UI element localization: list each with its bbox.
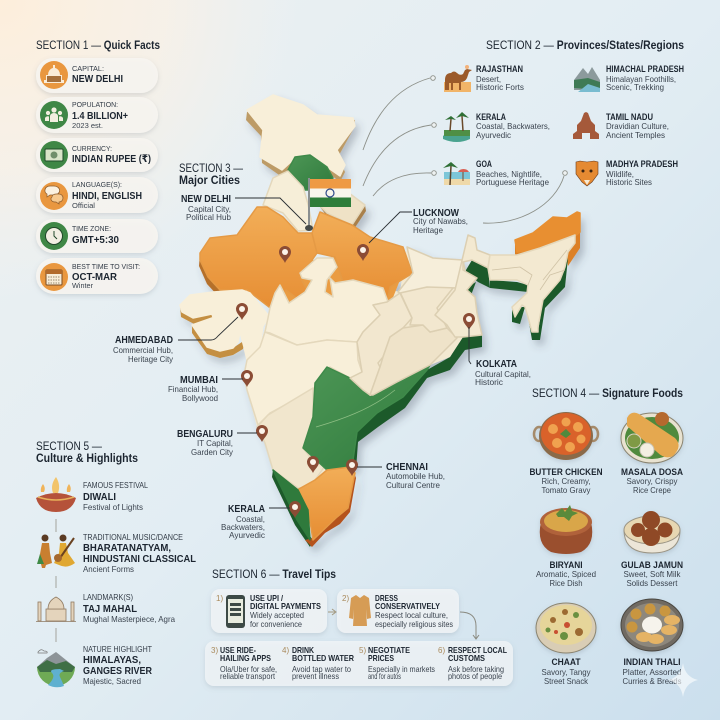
city: Kerala: KERALA xyxy=(228,504,265,515)
Rajasthan item: RAJASTHAN xyxy=(476,64,523,74)
base orange fill xyxy=(262,255,400,312)
card: currency xyxy=(36,138,158,172)
item: Himalayas: HIMALAYAS, xyxy=(83,654,141,666)
card: capital xyxy=(36,58,158,93)
tip 4: Avoid tap water to xyxy=(292,665,351,674)
item: Diwali: Festival of Lights xyxy=(83,503,143,512)
item: Taj Mahal: LANDMARK(S) xyxy=(83,593,133,602)
region: Uttarakhand xyxy=(317,180,365,225)
tip 1 card: DIGITAL PAYMENTS xyxy=(250,601,321,611)
item: Diwali: DIWALI xyxy=(83,491,116,503)
tip 4: 4) xyxy=(282,646,289,655)
icon: tiger xyxy=(576,161,598,186)
card: population: 2023 est. xyxy=(72,121,103,130)
Goa item xyxy=(443,159,549,187)
Goa item: GOA xyxy=(476,159,492,169)
Goa item: Beaches, Nightlife, xyxy=(476,170,542,179)
item: Taj Mahal: TAJ MAHAL xyxy=(83,603,138,615)
pin: Bengaluru coast xyxy=(256,425,268,442)
tip 2 card: especially religious sites xyxy=(375,620,453,629)
food: chaat: CHAAT xyxy=(552,657,581,667)
icon: mountains xyxy=(574,67,600,92)
tip 1 card: 1) xyxy=(216,594,223,603)
arrow: tip 1 to tip 2 xyxy=(328,609,336,615)
city: Ahmedabad: Heritage City xyxy=(128,355,174,364)
card: languages: LANGUAGE(S): xyxy=(72,180,122,189)
city: Lucknow: City of Nawabs, xyxy=(413,217,468,226)
item: Taj Mahal xyxy=(36,593,175,624)
section 1: quick facts xyxy=(36,40,160,294)
city: Chennai: Automobile Hub, xyxy=(386,472,445,481)
region: West Bengal xyxy=(435,235,490,337)
city: Ahmedabad xyxy=(113,335,174,364)
city: Lucknow xyxy=(413,208,468,235)
card: languages: HINDI, ENGLISH xyxy=(72,190,142,202)
pin: Kerala xyxy=(289,501,301,518)
arrow: tip 2 to tips row xyxy=(460,612,479,639)
Rajasthan item: Desert, xyxy=(476,75,501,84)
icon: dancers xyxy=(37,534,75,568)
region: Uttar Pradesh xyxy=(312,212,413,302)
tip 5: Especially in markets xyxy=(368,665,435,674)
city: Kolkata xyxy=(475,359,531,387)
city: Chennai xyxy=(386,462,445,490)
icon: palms xyxy=(443,112,470,142)
city: Chennai: Cultural Centre xyxy=(386,481,440,490)
tip 6: photos of people xyxy=(448,672,502,681)
heading line 2: Culture & Highlights xyxy=(36,453,138,465)
card: population: 1.4 BILLION+ xyxy=(72,110,128,122)
tip 3: 3) xyxy=(211,646,218,655)
tip 1 card: Widely accepted xyxy=(250,611,304,620)
tip 1 card: USE UPI / xyxy=(250,593,284,603)
item: Taj Mahal: Mughal Masterpiece, Agra xyxy=(83,615,175,624)
tip 5 xyxy=(359,645,435,681)
icon: dosa plate xyxy=(621,412,683,463)
region: Northeast xyxy=(488,235,575,332)
city: New Delhi: Capital City, xyxy=(188,205,231,214)
heading: section 5: SECTION 5 — xyxy=(36,441,102,453)
region: Madhya Pradesh xyxy=(265,258,388,345)
Madhya Pradesh item: Historic Sites xyxy=(606,178,652,187)
tip 2 card xyxy=(337,589,459,633)
tip 6: 6) xyxy=(438,646,445,655)
tip 2 card: 2) xyxy=(342,594,349,603)
tip 6 xyxy=(438,645,507,681)
map of India xyxy=(180,95,580,547)
icon: chaat bowl xyxy=(536,603,596,653)
heading: section 6: SECTION 6 — Travel Tips xyxy=(212,569,336,581)
Himachal item: Scenic, Trekking xyxy=(606,83,664,92)
Rajasthan item xyxy=(444,64,524,92)
city: Kolkata: Historic xyxy=(475,378,503,387)
region: Kerala xyxy=(273,470,310,540)
Tamil Nadu item: Ancient Temples xyxy=(606,131,665,140)
card: languages xyxy=(36,177,158,213)
card: best time to visit: OCT-MAR xyxy=(72,271,117,283)
region: Jharkhand xyxy=(400,283,457,332)
base silhouette xyxy=(244,247,482,488)
item: Himalayas xyxy=(37,645,152,687)
pin: Kolkata xyxy=(463,313,475,330)
city: Kerala: Coastal, xyxy=(236,515,265,524)
item: music and dance: HINDUSTANI CLASSICAL xyxy=(83,553,197,565)
tip 2 card: DRESS xyxy=(375,593,398,603)
Tamil Nadu item: Dravidian Culture, xyxy=(606,122,669,131)
city: New Delhi: Political Hub xyxy=(186,213,231,222)
pin: Rajasthan xyxy=(279,246,291,263)
card: time zone xyxy=(36,219,158,253)
item: music and dance: BHARATANATYAM, xyxy=(83,542,171,554)
pin: Chennai xyxy=(346,459,358,476)
tip 3: Ola/Uber for safe, xyxy=(220,665,277,674)
food: butter chicken: Rich, Creamy, xyxy=(542,477,590,486)
icon: gulab jamun bowl xyxy=(624,511,680,553)
region: Jammu Kashmir Ladakh xyxy=(247,95,355,176)
city: New Delhi: NEW DELHI xyxy=(181,194,231,205)
Kerala item: KERALA xyxy=(476,112,506,122)
item: music and dance xyxy=(37,533,197,574)
Kerala item xyxy=(443,112,550,142)
food: indian thali: Platter, Assorted xyxy=(622,668,682,677)
card: languages: Official xyxy=(72,201,95,210)
city: Chennai: CHENNAI xyxy=(386,462,428,473)
food: indian thali: Curries & Breads xyxy=(622,677,682,686)
region: Punjab Haryana xyxy=(263,171,313,231)
city: Ahmedabad: AHMEDABAD xyxy=(115,335,173,346)
food: butter chicken: BUTTER CHICKEN xyxy=(530,467,602,477)
tip 4: prevent illness xyxy=(292,672,339,681)
tip 5: NEGOTIATE xyxy=(368,645,410,655)
tip 4: DRINK xyxy=(292,645,315,655)
Kerala item: Coastal, Backwaters, xyxy=(476,122,550,131)
Rajasthan item: Historic Forts xyxy=(476,83,524,92)
icon: kurta xyxy=(349,595,371,626)
food: gulab jamun xyxy=(621,511,683,588)
food: butter chicken xyxy=(530,412,602,495)
item: Himalayas: NATURE HIGHLIGHT xyxy=(83,645,152,654)
Tamil Nadu item xyxy=(573,112,669,140)
food: chaat xyxy=(536,603,596,686)
icon: camel xyxy=(444,65,472,92)
pin: Ahmedabad xyxy=(236,303,248,320)
city leader lines xyxy=(178,198,471,508)
Tamil Nadu item: TAMIL NADU xyxy=(606,112,653,122)
region: Himachal xyxy=(288,155,333,190)
heading: section 3: SECTION 3 — xyxy=(179,163,243,175)
city: Bengaluru: IT Capital, xyxy=(197,439,233,448)
Himachal item: Himalayan Foothills, xyxy=(606,75,676,84)
region: Bihar xyxy=(398,247,465,293)
city: Kolkata: Cultural Capital, xyxy=(475,370,531,379)
item: music and dance: TRADITIONAL MUSIC/DANCE xyxy=(83,533,183,542)
section 3: major cities xyxy=(113,163,531,540)
city: Lucknow: Heritage xyxy=(413,226,443,235)
tip 6: CUSTOMS xyxy=(448,653,485,663)
tip 1 card: for convenience xyxy=(250,620,302,629)
tip 4 xyxy=(282,645,354,681)
map side walls xyxy=(180,95,580,547)
card: best time to visit xyxy=(36,258,158,294)
icon: curry pot xyxy=(534,412,598,460)
city: Mumbai xyxy=(168,375,218,403)
item: music and dance: Ancient Forms xyxy=(83,565,134,574)
city: Lucknow: LUCKNOW xyxy=(413,208,459,219)
Goa item: Portuguese Heritage xyxy=(476,178,549,187)
city: Kerala xyxy=(221,504,265,540)
sparkle watermark xyxy=(668,663,698,697)
food: chaat: Savory, Tangy xyxy=(542,668,591,677)
city: Bengaluru: BENGALURU xyxy=(177,429,233,440)
city: Kerala: Ayurvedic xyxy=(229,531,265,540)
food: masala dosa: Rice Crepe xyxy=(633,486,671,495)
food: chaat: Street Snack xyxy=(544,677,589,686)
tip 5: PRICES xyxy=(368,653,394,663)
food: butter chicken: Tomato Gravy xyxy=(542,486,591,495)
icon: mountain landscape xyxy=(37,650,75,687)
city: Kerala: Backwaters, xyxy=(221,523,265,532)
region tops xyxy=(180,95,580,540)
region: Tamil Nadu xyxy=(297,467,355,540)
region: Karnataka xyxy=(257,388,327,488)
food: biryani: Rice Dish xyxy=(550,579,583,588)
card: best time to visit: Winter xyxy=(72,281,93,290)
region: Arunachal xyxy=(515,212,580,252)
connector lines from regions to map xyxy=(363,76,567,223)
tip 1 card xyxy=(211,589,327,633)
tip 5: and for autos xyxy=(368,672,401,681)
pin: Bengaluru xyxy=(307,456,319,473)
tip 3: reliable transport xyxy=(220,672,276,681)
tip 2 card: CONSERVATIVELY xyxy=(375,601,440,611)
Gujarat side wall xyxy=(180,305,245,358)
tip 3 xyxy=(211,645,277,681)
item: Diwali: FAMOUS FESTIVAL xyxy=(83,481,148,490)
timeline connectors xyxy=(55,519,57,642)
food: gulab jamun: GULAB JAMUN xyxy=(621,560,683,570)
Madhya Pradesh item xyxy=(576,159,678,187)
food: gulab jamun: Solids Dessert xyxy=(626,579,678,588)
icon: temple xyxy=(573,112,599,139)
section 4: signature foods xyxy=(530,388,683,686)
food: biryani xyxy=(536,505,596,588)
icon: thali plate xyxy=(621,599,683,651)
food: indian thali xyxy=(621,599,683,686)
card: capital: CAPITAL: xyxy=(72,64,104,73)
region: Rajasthan xyxy=(200,207,317,310)
region: Andhra Telangana xyxy=(303,365,430,470)
tip 4: BOTTLED WATER xyxy=(292,653,354,663)
region: Odisha xyxy=(370,325,457,395)
icon: diya xyxy=(36,477,76,512)
card: population xyxy=(36,97,158,133)
card: currency: CURRENCY: xyxy=(72,144,112,153)
food: indian thali: INDIAN THALI xyxy=(624,657,680,667)
tip 3: USE RIDE- xyxy=(220,645,256,655)
section 6: travel tips xyxy=(205,569,513,686)
card: time zone: TIME ZONE: xyxy=(72,224,111,233)
card: time zone: GMT+5:30 xyxy=(72,234,119,246)
tip 6: RESPECT LOCAL xyxy=(448,645,507,655)
heading: section 2: SECTION 2 — Provinces/States/Regions xyxy=(486,40,684,52)
food: biryani: Aromatic, Spiced xyxy=(536,570,596,579)
food: gulab jamun: Sweet, Soft Milk xyxy=(624,570,681,579)
tip 6: Ask before taking xyxy=(448,665,504,674)
item: Himalayas: GANGES RIVER xyxy=(83,665,152,677)
Madhya Pradesh item: Wildlife, xyxy=(606,170,634,179)
Himachal item xyxy=(574,64,684,92)
section 2: provinces xyxy=(443,40,684,187)
flag of India xyxy=(305,178,351,231)
card: best time to visit: BEST TIME TO VISIT: xyxy=(72,262,140,271)
heading: section 4: SECTION 4 — Signature Foods xyxy=(532,388,683,400)
food: masala dosa xyxy=(621,412,683,495)
pin: Lucknow xyxy=(357,244,369,261)
food: masala dosa: MASALA DOSA xyxy=(621,467,683,477)
city: Bengaluru xyxy=(177,429,234,457)
city: Ahmedabad: Commercial Hub, xyxy=(113,346,173,355)
river xyxy=(316,390,395,427)
pin: Mumbai xyxy=(241,370,253,387)
region: Maharashtra xyxy=(244,332,362,425)
region: Gujarat xyxy=(180,290,268,360)
Kerala item: Ayurvedic xyxy=(476,131,511,140)
Himachal item: HIMACHAL PRADESH xyxy=(606,64,684,74)
city: Bengaluru: Garden City xyxy=(191,448,234,457)
city: Kolkata: KOLKATA xyxy=(476,359,517,370)
Madhya Pradesh item: MADHYA PRADESH xyxy=(606,159,678,169)
item: Himalayas: Majestic, Sacred xyxy=(83,677,141,686)
heading line 2: Major Cities xyxy=(179,175,240,187)
section 5: culture and highlights xyxy=(36,441,197,687)
card: capital: NEW DELHI xyxy=(72,73,123,85)
food: masala dosa: Savory, Crispy xyxy=(626,477,678,486)
item: Diwali xyxy=(36,477,148,512)
city: Mumbai: Financial Hub, xyxy=(168,385,218,394)
city: New Delhi xyxy=(181,194,231,222)
city: Mumbai: MUMBAI xyxy=(180,375,218,386)
tips 3 to 6 card xyxy=(205,641,513,686)
region: Chhattisgarh xyxy=(350,293,412,395)
tip 3: HAILING APPS xyxy=(220,653,271,663)
icon: biryani pot xyxy=(540,505,592,554)
tip 5: 5) xyxy=(359,646,366,655)
card: population: POPULATION: xyxy=(72,100,118,109)
tip 2 card: Respect local culture, xyxy=(375,611,448,620)
icon: beach xyxy=(443,162,470,185)
heading: section 1: SECTION 1 — Quick Facts xyxy=(36,40,160,52)
food: biryani: BIRYANI xyxy=(550,560,582,570)
icon: phone QR xyxy=(226,595,245,628)
city: Mumbai: Bollywood xyxy=(182,394,218,403)
card: currency: INDIAN RUPEE (₹) xyxy=(72,153,151,165)
icon: Taj Mahal xyxy=(36,597,76,622)
